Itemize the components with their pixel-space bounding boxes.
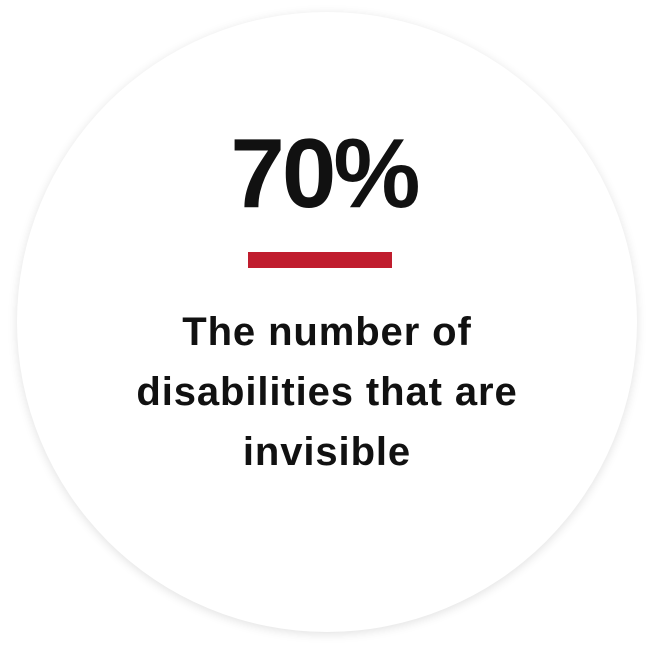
- caption text: invisible: [243, 430, 411, 474]
- big number: 70%: [230, 118, 418, 228]
- caption text: [136, 310, 518, 474]
- caption text: disabilities that are: [136, 370, 518, 414]
- red divider bar: [248, 252, 392, 268]
- caption text: The number of: [182, 310, 472, 354]
